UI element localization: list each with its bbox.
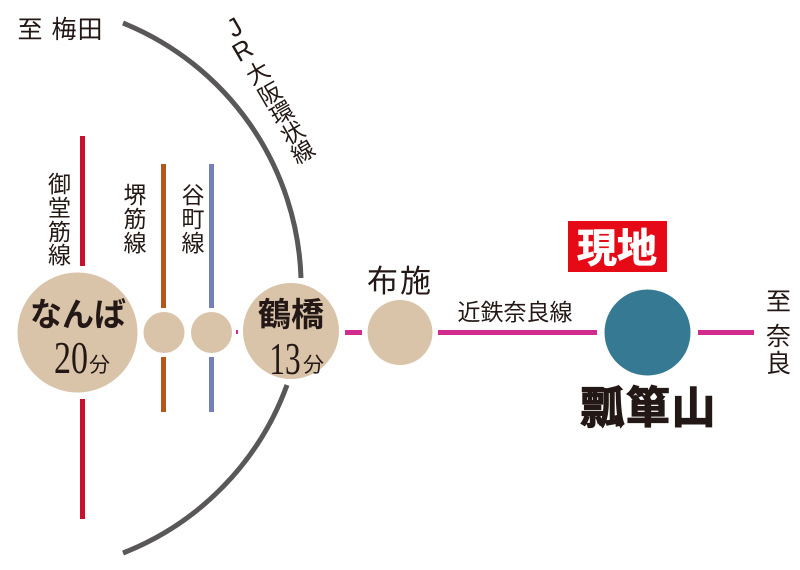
station: Tsuruhashi: 13 [269, 333, 301, 385]
label: JR Osaka Loop Line: 阪 [254, 77, 286, 111]
current location badge [568, 221, 667, 272]
label: Tanimachi line: 線 [182, 230, 204, 256]
label: JR Osaka Loop Line: 大 [242, 56, 274, 90]
label: to Nara [766, 288, 791, 378]
label: JR Osaka Loop Line: R [227, 33, 258, 68]
label: JR Osaka Loop Line: J [221, 11, 248, 43]
Midosuji line, lower segment [80, 399, 85, 519]
label: Midosuji line: 堂 [48, 195, 71, 221]
Tanimachi line, upper segment [209, 164, 214, 308]
station: Hyotanyama [604, 290, 690, 376]
Kintetsu Nara line segments [236, 330, 754, 335]
Sakaisuji line, upper segment [161, 164, 166, 308]
label: JR Osaka Loop Line [221, 11, 319, 169]
label: JR Osaka Loop Line: 環 [266, 96, 298, 130]
label: to Umeda: 至 梅田 [18, 16, 102, 44]
label: Midosuji line: 筋 [48, 219, 71, 245]
Sakaisuji line, lower segment [161, 357, 166, 412]
station: Fuse: 布施 [367, 264, 431, 299]
JR Osaka Loop Line arc, upper [123, 23, 301, 278]
label: Midosuji line: 線 [48, 242, 71, 268]
station: Namba: なんば [30, 296, 126, 333]
station: Tanimachi interchange [191, 312, 232, 353]
station: Tsuruhashi: 鶴橋 [258, 296, 324, 333]
station name: Hyotanyama: 瓢箪山 [580, 384, 716, 433]
label: JR Osaka Loop Line: 線 [287, 135, 319, 169]
label: Tanimachi line: 谷 [182, 182, 204, 208]
Midosuji line, upper segment [80, 136, 85, 266]
station: Sakaisuji interchange [144, 312, 184, 353]
JR Osaka Loop Line arc, lower [123, 385, 287, 553]
label: Kintetsu Nara line: 近鉄奈良線 [458, 299, 572, 325]
current location badge: 現地 [577, 227, 657, 271]
station: Fuse [367, 264, 432, 365]
label: Midosuji line: 御 [48, 171, 71, 197]
label: Sakaisuji line [124, 182, 146, 256]
station: Namba: 20 [54, 332, 88, 383]
station: Namba: 分 [89, 354, 110, 377]
label: to Nara: 至 [766, 288, 791, 316]
label: to Nara: 奈 [766, 323, 791, 351]
label: Tanimachi line: 町 [182, 206, 204, 232]
label: to Nara: 良 [766, 350, 791, 378]
label: JR Osaka Loop Line: 状 [277, 116, 309, 150]
label: Sakaisuji line: 線 [124, 230, 146, 256]
label: Tanimachi line [182, 182, 204, 256]
station: Namba [18, 272, 138, 392]
station: Tsuruhashi [243, 283, 339, 385]
Tanimachi line, lower segment [209, 357, 214, 412]
label: Sakaisuji line: 堺 [124, 182, 146, 208]
label: Midosuji line [48, 171, 71, 268]
label: Sakaisuji line: 筋 [124, 206, 146, 232]
station: Tsuruhashi: 分 [303, 354, 324, 377]
